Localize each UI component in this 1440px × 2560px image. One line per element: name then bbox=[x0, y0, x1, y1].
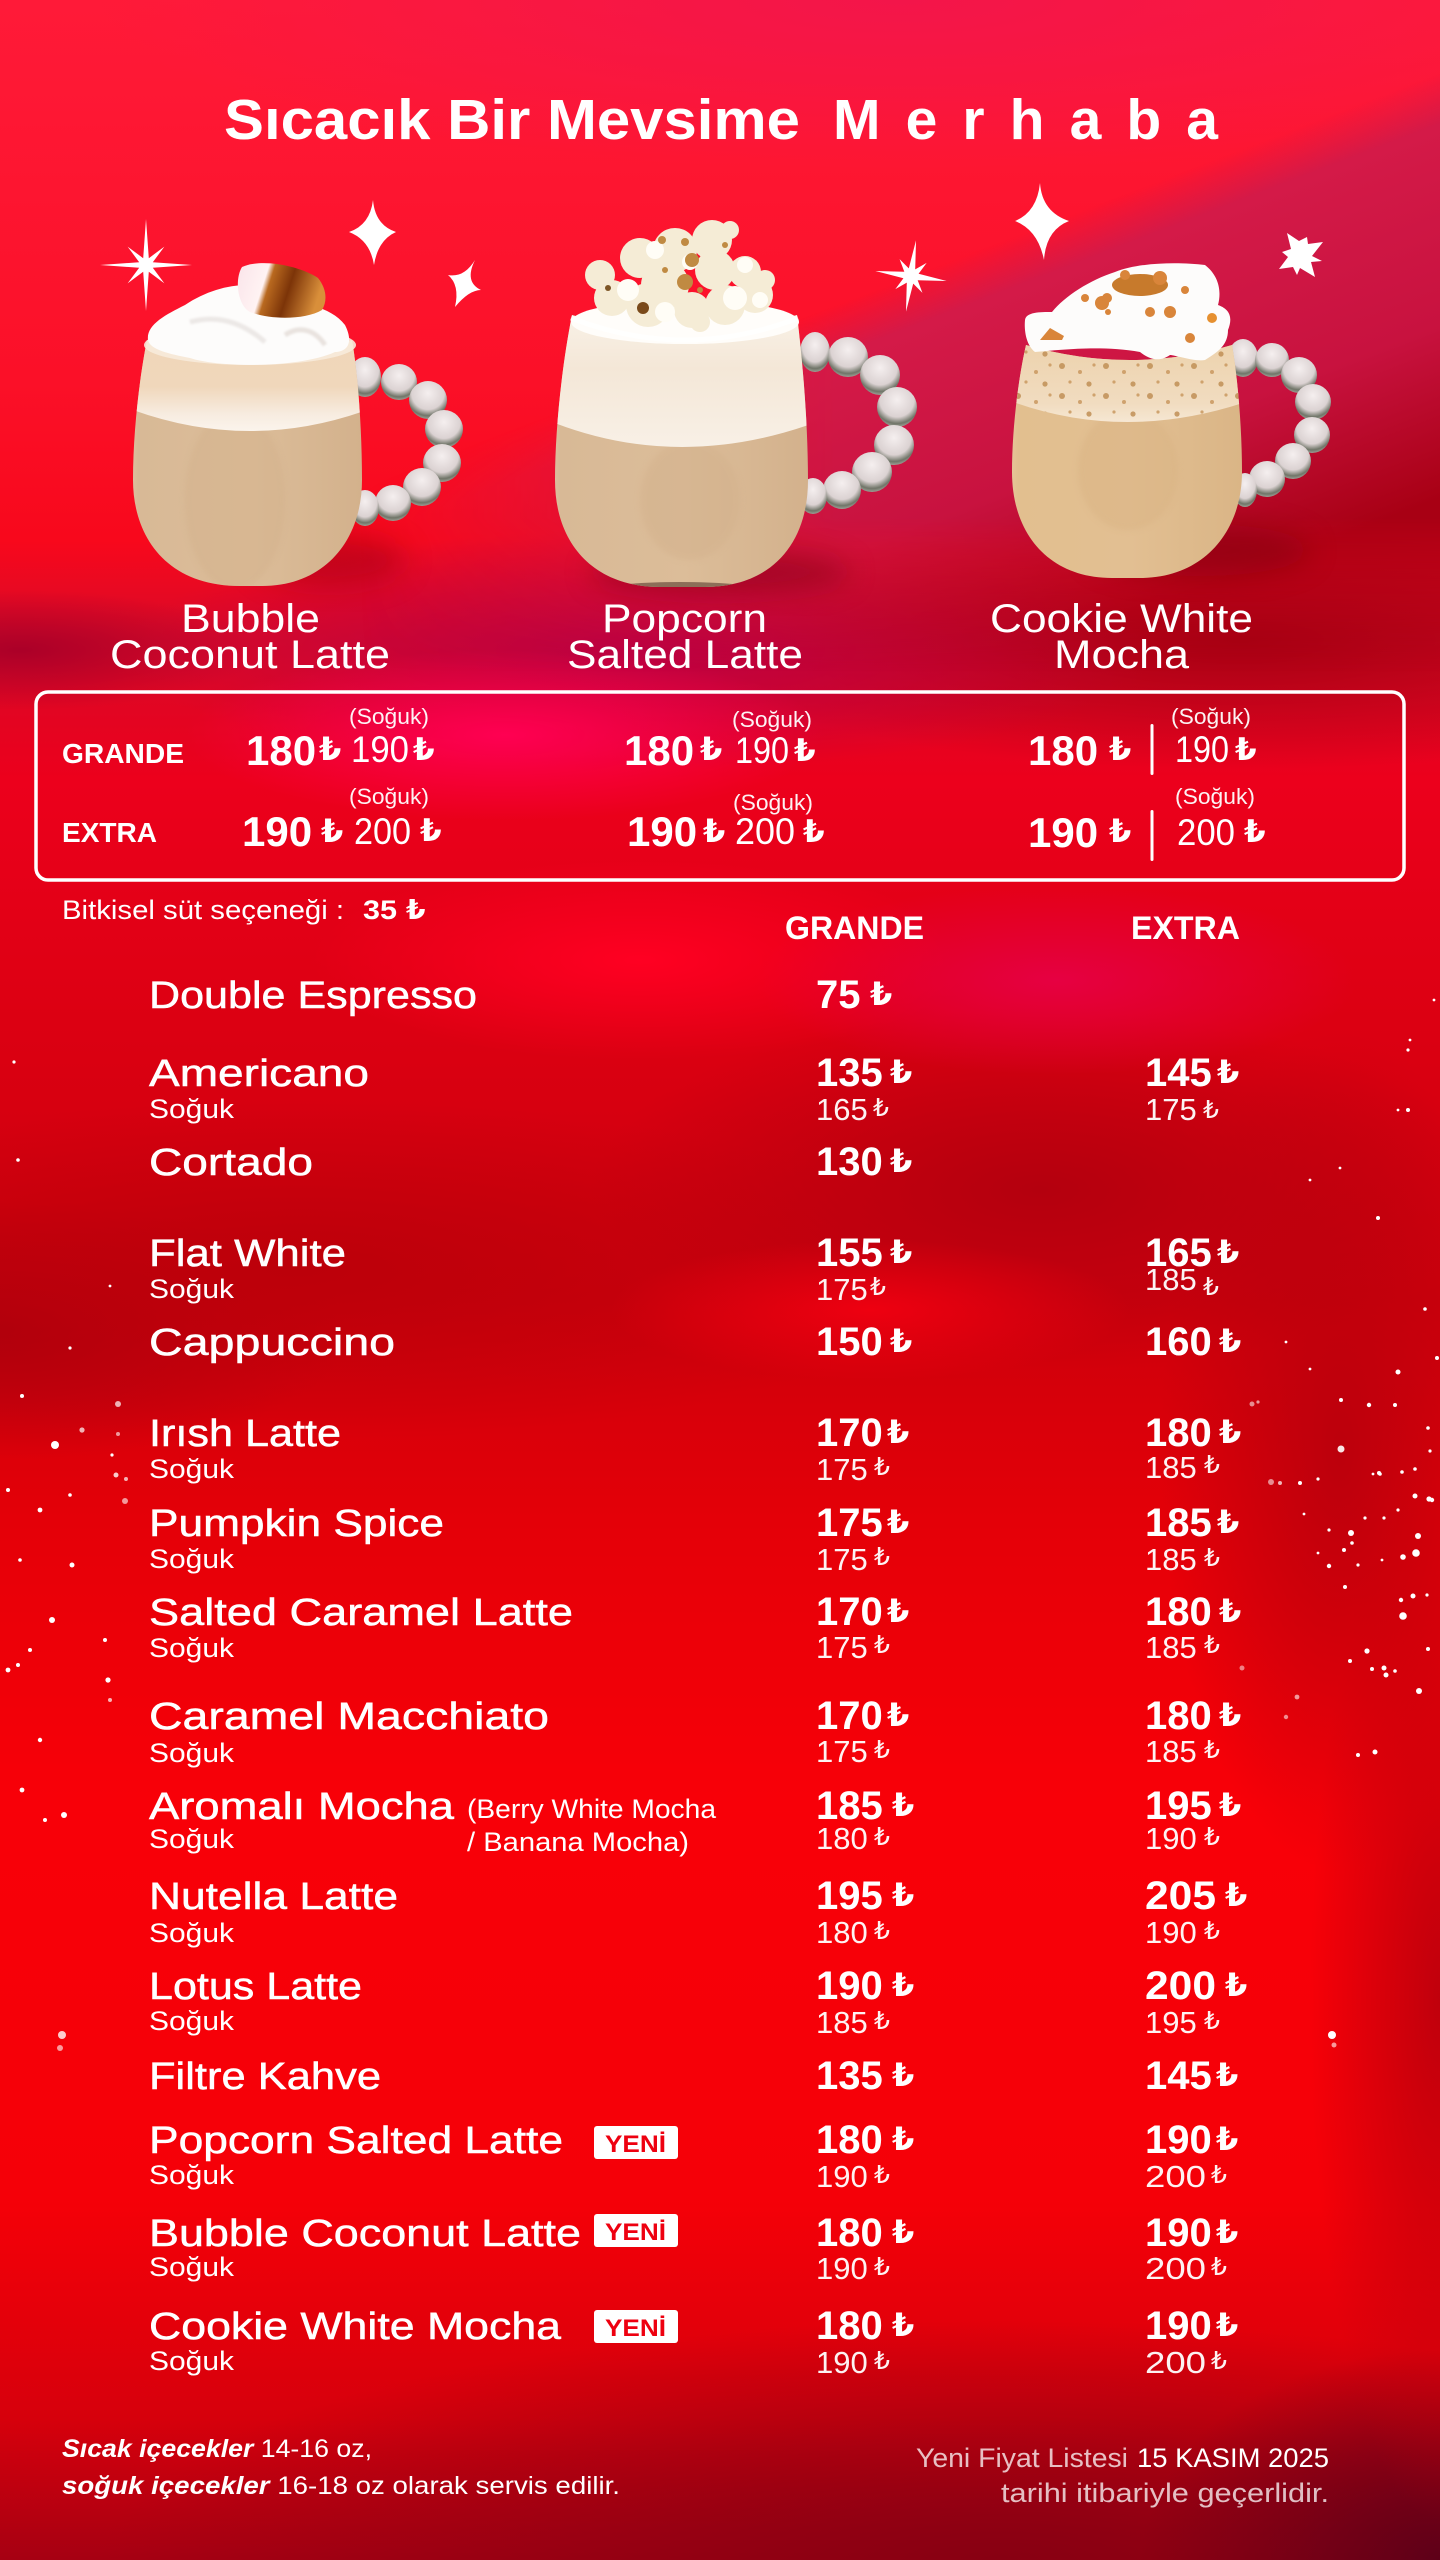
footer note: serving sizes: soğuk içecekler 16-18 oz olarak servis edilir. bbox=[62, 2472, 620, 2500]
row: Americano: ₺ bbox=[873, 1094, 889, 1122]
row: Popcorn Salted Latte: 180 bbox=[816, 2118, 883, 2162]
row: Salted Caramel Latte: 180 bbox=[1145, 1590, 1212, 1634]
row: Popcorn Salted Latte: 190 bbox=[1145, 2118, 1212, 2162]
featured: Popcorn Salted Latte prices: ₺ bbox=[700, 731, 722, 767]
row: Aromalı Mocha: ₺ bbox=[892, 1787, 914, 1823]
row: Aromalı Mocha: / Banana Mocha) bbox=[467, 1827, 689, 1857]
row: Salted Caramel Latte: 175 bbox=[816, 1630, 868, 1665]
row: Americano: Soğuk bbox=[149, 1094, 235, 1124]
row: Lotus Latte: ₺ bbox=[892, 1967, 914, 2003]
footer note: serving sizes bbox=[62, 2435, 620, 2500]
row: Cookie White Mocha: 200 bbox=[1145, 2345, 1206, 2380]
row: Double Espresso: ₺ bbox=[870, 976, 892, 1012]
featured: Cookie White Mocha prices: 180 bbox=[1028, 727, 1098, 774]
footer note: price list date: tarihi itibariyle geçerlidir. bbox=[1001, 2478, 1329, 2508]
row: Flat White: 185 bbox=[1145, 1262, 1197, 1297]
drink names: Coconut Latte bbox=[110, 633, 390, 677]
row: Cortado: 130 bbox=[816, 1140, 883, 1184]
row: Popcorn Salted Latte bbox=[149, 2118, 1238, 2194]
row: Flat White: 165 bbox=[1145, 1231, 1212, 1275]
featured: Cookie White Mocha prices: 190 bbox=[1028, 809, 1098, 856]
row: Bubble Coconut Latte: ₺ bbox=[1211, 2253, 1227, 2281]
row: Pumpkin Spice bbox=[149, 1501, 1239, 1577]
row: Irısh Latte: 180 bbox=[1145, 1411, 1212, 1455]
row: Lotus Latte: Lotus Latte bbox=[149, 1966, 362, 2008]
row: Cookie White Mocha: Soğuk bbox=[149, 2346, 235, 2376]
row: Nutella Latte: ₺ bbox=[874, 1917, 890, 1945]
featured: Popcorn Salted Latte prices: (Soğuk) bbox=[732, 707, 812, 732]
row: Cappuccino bbox=[149, 1320, 1241, 1364]
row: Bubble Coconut Latte bbox=[149, 2211, 1238, 2286]
featured: Bubble Coconut Latte prices bbox=[242, 704, 442, 855]
row: Popcorn Salted Latte: Popcorn Salted Latte bbox=[149, 2120, 563, 2162]
row: Flat White: 155 bbox=[816, 1231, 883, 1275]
size labels: GRANDE bbox=[62, 738, 184, 769]
row: Cookie White Mocha: 190 bbox=[1145, 2304, 1212, 2348]
row: Caramel Macchiato: 180 bbox=[1145, 1694, 1212, 1738]
row: Bubble Coconut Latte: YENİ bbox=[605, 2219, 666, 2246]
row: Nutella Latte: 180 bbox=[816, 1915, 868, 1950]
row: Nutella Latte: ₺ bbox=[892, 1877, 914, 1913]
row: Irısh Latte: ₺ bbox=[874, 1453, 890, 1481]
row: Americano: ₺ bbox=[1217, 1054, 1239, 1090]
row: Lotus Latte: ₺ bbox=[1225, 1967, 1247, 2003]
featured: Bubble Coconut Latte prices: 190 bbox=[242, 808, 312, 855]
row: Caramel Macchiato: ₺ bbox=[887, 1697, 909, 1733]
row: Cookie White Mocha: ₺ bbox=[874, 2347, 890, 2375]
row: Pumpkin Spice: ₺ bbox=[1217, 1504, 1239, 1540]
row: Caramel Macchiato: 185 bbox=[1145, 1734, 1197, 1769]
row: Irısh Latte: ₺ bbox=[1204, 1451, 1220, 1479]
featured: Bubble Coconut Latte prices: 200 bbox=[354, 811, 411, 852]
drink names: Salted Latte bbox=[567, 633, 803, 677]
row: Salted Caramel Latte: 170 bbox=[816, 1590, 883, 1634]
row: Salted Caramel Latte bbox=[149, 1590, 1241, 1665]
row: Caramel Macchiato: Soğuk bbox=[149, 1738, 235, 1768]
plant milk note: Bitkisel süt seçeneği : bbox=[62, 895, 344, 925]
row: Filtre Kahve: ₺ bbox=[892, 2057, 914, 2093]
row: Irısh Latte: Soğuk bbox=[149, 1454, 235, 1484]
featured: Cookie White Mocha prices: (Soğuk) bbox=[1171, 704, 1251, 729]
row: Nutella Latte: ₺ bbox=[1204, 1917, 1220, 1945]
row: Pumpkin Spice: Pumpkin Spice bbox=[149, 1503, 444, 1545]
row: Flat White: 175 bbox=[816, 1272, 868, 1307]
title bbox=[224, 88, 1219, 152]
row: Flat White: Flat White bbox=[149, 1233, 346, 1275]
row: Cookie White Mocha: 190 bbox=[816, 2345, 868, 2380]
featured: Bubble Coconut Latte prices: 180 bbox=[246, 727, 316, 774]
featured: Bubble Coconut Latte prices: 190 bbox=[351, 729, 409, 770]
row: Cappuccino: 160 bbox=[1145, 1320, 1212, 1364]
row: Cookie White Mocha: ₺ bbox=[892, 2307, 914, 2343]
row: Americano: 165 bbox=[816, 1092, 868, 1127]
row: Lotus Latte: Soğuk bbox=[149, 2006, 235, 2036]
row: Cookie White Mocha: ₺ bbox=[1216, 2307, 1238, 2343]
featured: Cookie White Mocha prices: 190 bbox=[1175, 729, 1229, 770]
row: Lotus Latte: ₺ bbox=[874, 2007, 890, 2035]
row: Salted Caramel Latte: ₺ bbox=[1204, 1631, 1220, 1659]
row: Irısh Latte: ₺ bbox=[1219, 1414, 1241, 1450]
row: Bubble Coconut Latte: Bubble Coconut Latte bbox=[149, 2213, 581, 2255]
drink names: Cookie White bbox=[990, 597, 1253, 641]
row: Cookie White Mocha: ₺ bbox=[1211, 2347, 1227, 2375]
footer note: price list date bbox=[916, 2443, 1329, 2508]
column headers: EXTRA bbox=[1131, 910, 1240, 946]
footer note: price list date: Yeni Fiyat Listesi bbox=[916, 2443, 1128, 2473]
row: Pumpkin Spice: 185 bbox=[1145, 1542, 1197, 1577]
row: Irısh Latte: 175 bbox=[816, 1452, 868, 1487]
row: Popcorn Salted Latte: 200 bbox=[1145, 2159, 1206, 2194]
row: Filtre Kahve: 135 bbox=[816, 2054, 883, 2098]
row: Popcorn Salted Latte: ₺ bbox=[874, 2161, 890, 2189]
plant milk note bbox=[62, 894, 425, 925]
row: Pumpkin Spice: 175 bbox=[816, 1501, 883, 1545]
row: Caramel Macchiato bbox=[149, 1694, 1241, 1769]
row: Popcorn Salted Latte: ₺ bbox=[1216, 2121, 1238, 2157]
menu list bbox=[149, 973, 1247, 2380]
featured: Bubble Coconut Latte prices: ₺ bbox=[413, 732, 435, 767]
row: Flat White: ₺ bbox=[870, 1273, 886, 1301]
row: Cookie White Mocha: YENİ bbox=[605, 2315, 666, 2342]
row: Cortado: ₺ bbox=[890, 1143, 912, 1179]
row: Aromalı Mocha: ₺ bbox=[874, 1823, 890, 1851]
featured: Bubble Coconut Latte prices: (Soğuk) bbox=[349, 784, 429, 809]
row: Caramel Macchiato: 175 bbox=[816, 1734, 868, 1769]
drink names bbox=[110, 597, 1253, 677]
row: Nutella Latte: Nutella Latte bbox=[149, 1876, 398, 1918]
featured: Popcorn Salted Latte prices: ₺ bbox=[803, 814, 825, 849]
row: Popcorn Salted Latte: Soğuk bbox=[149, 2160, 235, 2190]
row: Pumpkin Spice: ₺ bbox=[1204, 1544, 1220, 1572]
row: Americano: 175 bbox=[1145, 1092, 1197, 1127]
featured: Popcorn Salted Latte prices: (Soğuk) bbox=[733, 790, 813, 815]
row: Aromalı Mocha bbox=[149, 1784, 1241, 1857]
row: Popcorn Salted Latte: ₺ bbox=[892, 2121, 914, 2157]
row: Filtre Kahve: ₺ bbox=[1216, 2057, 1238, 2093]
drink names: Bubble bbox=[181, 597, 320, 641]
row: Cappuccino: ₺ bbox=[1219, 1323, 1241, 1359]
row: Aromalı Mocha: Aromalı Mocha bbox=[149, 1786, 455, 1828]
row: Double Espresso: Double Espresso bbox=[149, 975, 477, 1017]
row: Lotus Latte: 185 bbox=[816, 2005, 868, 2040]
plant milk note: ₺ bbox=[406, 894, 425, 925]
row: Aromalı Mocha: 190 bbox=[1145, 1821, 1197, 1856]
row: Cookie White Mocha bbox=[149, 2304, 1238, 2380]
row: Filtre Kahve: Filtre Kahve bbox=[149, 2056, 381, 2098]
row: Cortado: Cortado bbox=[149, 1142, 313, 1184]
row: Bubble Coconut Latte: ₺ bbox=[892, 2214, 914, 2250]
featured: Bubble Coconut Latte prices: ₺ bbox=[319, 731, 341, 767]
row: Cappuccino: Cappuccino bbox=[149, 1322, 395, 1364]
plant milk note: 35 bbox=[363, 895, 397, 925]
row: Irısh Latte: ₺ bbox=[887, 1414, 909, 1450]
row: Nutella Latte: ₺ bbox=[1225, 1877, 1247, 1913]
title: M e r h a b a bbox=[833, 88, 1219, 152]
row: Nutella Latte: Soğuk bbox=[149, 1918, 235, 1948]
size labels: EXTRA bbox=[62, 817, 157, 848]
row: Irısh Latte: 185 bbox=[1145, 1450, 1197, 1485]
row: Irısh Latte: 170 bbox=[816, 1411, 883, 1455]
featured: Cookie White Mocha prices bbox=[1028, 704, 1266, 861]
row: Lotus Latte: ₺ bbox=[1204, 2007, 1220, 2035]
featured: Cookie White Mocha prices: ₺ bbox=[1244, 814, 1266, 849]
row: Cortado bbox=[149, 1140, 912, 1184]
row: Salted Caramel Latte: ₺ bbox=[887, 1593, 909, 1629]
row: Lotus Latte: 195 bbox=[1145, 2005, 1197, 2040]
featured: Cookie White Mocha prices: (Soğuk) bbox=[1175, 784, 1255, 809]
row: Irısh Latte bbox=[149, 1411, 1241, 1487]
panel: featured prices bbox=[36, 692, 1404, 880]
row: Aromalı Mocha: ₺ bbox=[1204, 1823, 1220, 1851]
row: Filtre Kahve: 145 bbox=[1145, 2054, 1212, 2098]
featured: Bubble Coconut Latte prices: ₺ bbox=[420, 813, 442, 848]
row: Bubble Coconut Latte: ₺ bbox=[874, 2253, 890, 2281]
row: Aromalı Mocha: Soğuk bbox=[149, 1824, 235, 1854]
featured: Cookie White Mocha prices: ₺ bbox=[1109, 731, 1131, 767]
featured: Bubble Coconut Latte prices: ₺ bbox=[321, 813, 343, 849]
row: Pumpkin Spice: Soğuk bbox=[149, 1544, 235, 1574]
row: Flat White bbox=[149, 1231, 1239, 1307]
row: Nutella Latte: 195 bbox=[816, 1874, 883, 1918]
row: Americano: ₺ bbox=[890, 1054, 912, 1090]
row: Aromalı Mocha: ₺ bbox=[1219, 1787, 1241, 1823]
featured: Cookie White Mocha prices: ₺ bbox=[1109, 813, 1131, 849]
row: Nutella Latte: 190 bbox=[1145, 1915, 1197, 1950]
row: Cappuccino: ₺ bbox=[890, 1323, 912, 1359]
row: Caramel Macchiato: ₺ bbox=[874, 1736, 890, 1764]
row: Flat White: ₺ bbox=[1217, 1234, 1239, 1270]
row: Filtre Kahve bbox=[149, 2054, 1238, 2098]
row: Salted Caramel Latte: Salted Caramel Latte bbox=[149, 1592, 573, 1634]
row: Caramel Macchiato: 170 bbox=[816, 1694, 883, 1738]
row: Americano bbox=[149, 1051, 1239, 1127]
featured: Popcorn Salted Latte prices bbox=[624, 707, 825, 855]
row: Aromalı Mocha: 195 bbox=[1145, 1784, 1212, 1828]
row: Irısh Latte: Irısh Latte bbox=[149, 1413, 341, 1455]
row: Popcorn Salted Latte: 190 bbox=[816, 2159, 868, 2194]
row: Bubble Coconut Latte: 200 bbox=[1145, 2251, 1206, 2286]
footer note: serving sizes: Sıcak içecekler 14-16 oz, bbox=[62, 2435, 372, 2463]
featured: Popcorn Salted Latte prices: 190 bbox=[735, 730, 789, 771]
row: Popcorn Salted Latte: YENİ bbox=[605, 2131, 666, 2158]
row: Flat White: Soğuk bbox=[149, 1274, 235, 1304]
row: Lotus Latte bbox=[149, 1964, 1247, 2040]
featured: Popcorn Salted Latte prices: ₺ bbox=[794, 733, 816, 768]
row: Salted Caramel Latte: ₺ bbox=[874, 1631, 890, 1659]
row: Americano: Americano bbox=[149, 1053, 369, 1095]
row: Aromalı Mocha: (Berry White Mocha bbox=[467, 1794, 717, 1824]
footer note: price list date: 15 KASIM 2025 bbox=[1137, 2443, 1329, 2473]
row: Salted Caramel Latte: Soğuk bbox=[149, 1633, 235, 1663]
row: Pumpkin Spice: 185 bbox=[1145, 1501, 1212, 1545]
featured: Bubble Coconut Latte prices: (Soğuk) bbox=[349, 704, 429, 729]
sparkle dust bbox=[6, 999, 1439, 2051]
drink: Cookie White Mocha mug bbox=[1000, 263, 1331, 590]
featured: Cookie White Mocha prices: ₺ bbox=[1235, 732, 1257, 767]
title: Sıcacık Bir Mevsime bbox=[224, 88, 800, 152]
row: Americano: 145 bbox=[1145, 1051, 1212, 1095]
sparkle stars bbox=[100, 183, 1323, 317]
row: Lotus Latte: 200 bbox=[1145, 1964, 1216, 2008]
row: Bubble Coconut Latte: 190 bbox=[816, 2251, 868, 2286]
drink names: Popcorn bbox=[602, 597, 767, 641]
row: Pumpkin Spice: ₺ bbox=[874, 1543, 890, 1571]
row: Bubble Coconut Latte: ₺ bbox=[1216, 2214, 1238, 2250]
row: Pumpkin Spice: 175 bbox=[816, 1542, 868, 1577]
column headers: GRANDE bbox=[785, 910, 924, 946]
featured: Popcorn Salted Latte prices: 200 bbox=[735, 811, 795, 852]
featured: Popcorn Salted Latte prices: ₺ bbox=[703, 813, 725, 849]
row: Salted Caramel Latte: ₺ bbox=[1219, 1593, 1241, 1629]
row: Double Espresso bbox=[149, 973, 892, 1017]
row: Cappuccino: 150 bbox=[816, 1320, 883, 1364]
row: Caramel Macchiato: ₺ bbox=[1204, 1736, 1220, 1764]
drink names: Mocha bbox=[1054, 633, 1190, 677]
row: Caramel Macchiato: ₺ bbox=[1219, 1697, 1241, 1733]
row: Americano: ₺ bbox=[1203, 1096, 1219, 1124]
featured: Cookie White Mocha prices: 200 bbox=[1177, 812, 1235, 853]
row: Nutella Latte: 205 bbox=[1145, 1874, 1216, 1918]
featured: Popcorn Salted Latte prices: 190 bbox=[627, 808, 697, 855]
row: Caramel Macchiato: Caramel Macchiato bbox=[149, 1696, 549, 1738]
row: Nutella Latte bbox=[149, 1874, 1247, 1950]
row: Aromalı Mocha: 185 bbox=[816, 1784, 883, 1828]
row: Salted Caramel Latte: 185 bbox=[1145, 1630, 1197, 1665]
drink: Bubble Coconut Latte mug bbox=[120, 263, 463, 600]
row: Bubble Coconut Latte: Soğuk bbox=[149, 2252, 235, 2282]
row: Lotus Latte: 190 bbox=[816, 1964, 883, 2008]
featured: Popcorn Salted Latte prices: 180 bbox=[624, 727, 694, 774]
row: Americano: 135 bbox=[816, 1051, 883, 1095]
row: Pumpkin Spice: ₺ bbox=[887, 1504, 909, 1540]
row: Cookie White Mocha: 180 bbox=[816, 2304, 883, 2348]
row: Aromalı Mocha: 180 bbox=[816, 1821, 868, 1856]
row: Popcorn Salted Latte: ₺ bbox=[1211, 2161, 1227, 2189]
row: Bubble Coconut Latte: 180 bbox=[816, 2211, 883, 2255]
row: Flat White: ₺ bbox=[890, 1234, 912, 1270]
drink: Popcorn Salted Latte mug bbox=[540, 220, 917, 600]
row: Flat White: ₺ bbox=[1203, 1273, 1219, 1301]
row: Double Espresso: 75 bbox=[816, 973, 860, 1017]
row: Bubble Coconut Latte: 190 bbox=[1145, 2211, 1212, 2255]
row: Cookie White Mocha: Cookie White Mocha bbox=[149, 2306, 562, 2348]
size labels bbox=[62, 738, 184, 848]
column headers bbox=[785, 910, 1240, 946]
